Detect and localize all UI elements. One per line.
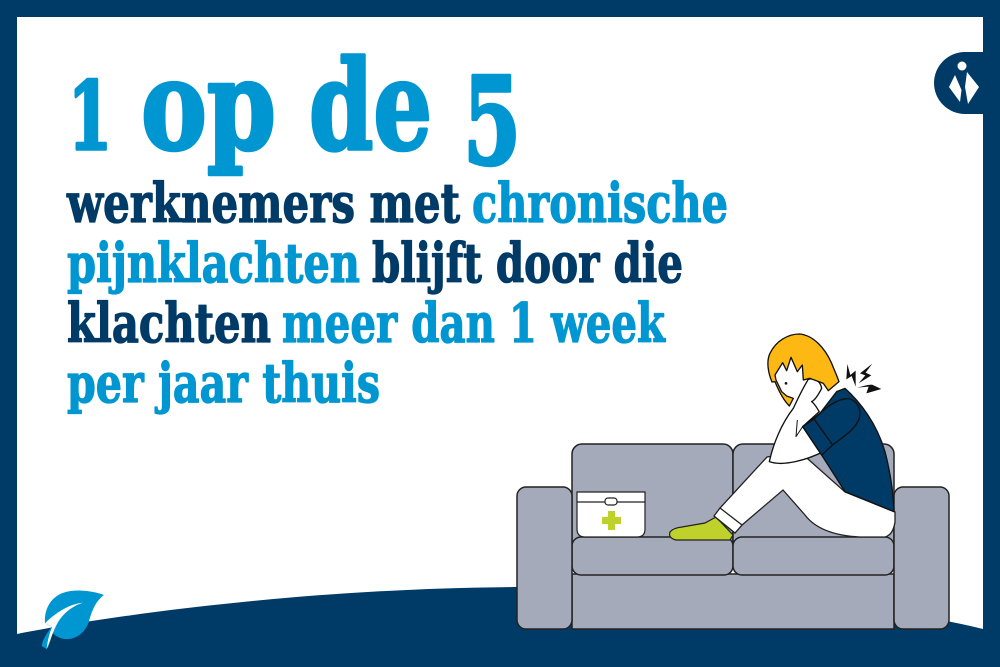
icon: first aid kit: [577, 492, 645, 537]
shirt: [803, 388, 894, 512]
face: [775, 365, 803, 402]
title: 1 op de 5: op: [141, 34, 276, 179]
sofa arm left: [517, 487, 572, 629]
statement text: pijnklachten: [67, 231, 360, 295]
sofa arm right: [894, 487, 949, 629]
eye: [785, 382, 787, 385]
legs: [715, 452, 895, 537]
title: 1 op de 5: 1: [68, 62, 112, 172]
statement text: [66, 171, 728, 415]
trouser cuff: [714, 508, 742, 533]
hair: [768, 334, 839, 406]
statement text: klachten: [67, 291, 271, 355]
title: 1 op de 5: [68, 34, 521, 193]
icon: top-right logo tab: [934, 52, 983, 114]
icon: leaf logo: [42, 591, 104, 649]
illustration: person in pain: [670, 334, 895, 540]
pain bolts: [846, 364, 881, 393]
sofa base: [572, 574, 894, 629]
sofa back cushions: [572, 444, 894, 554]
illustration: sofa: [517, 444, 949, 629]
statement text: chronische: [472, 171, 728, 235]
arm: [769, 379, 823, 463]
statement text: werknemers met: [66, 171, 460, 235]
socks: [670, 517, 733, 540]
sleeve: [803, 399, 860, 455]
title: 1 op de 5: 5: [463, 50, 521, 193]
title: 1 op de 5: de: [309, 34, 432, 179]
statement text: blijft door die: [372, 231, 683, 295]
inner arm line: [796, 420, 803, 437]
statement text: meer dan 1 week: [282, 291, 666, 355]
statement text: per jaar thuis: [67, 351, 380, 415]
sofa seat cushions: [572, 537, 894, 575]
